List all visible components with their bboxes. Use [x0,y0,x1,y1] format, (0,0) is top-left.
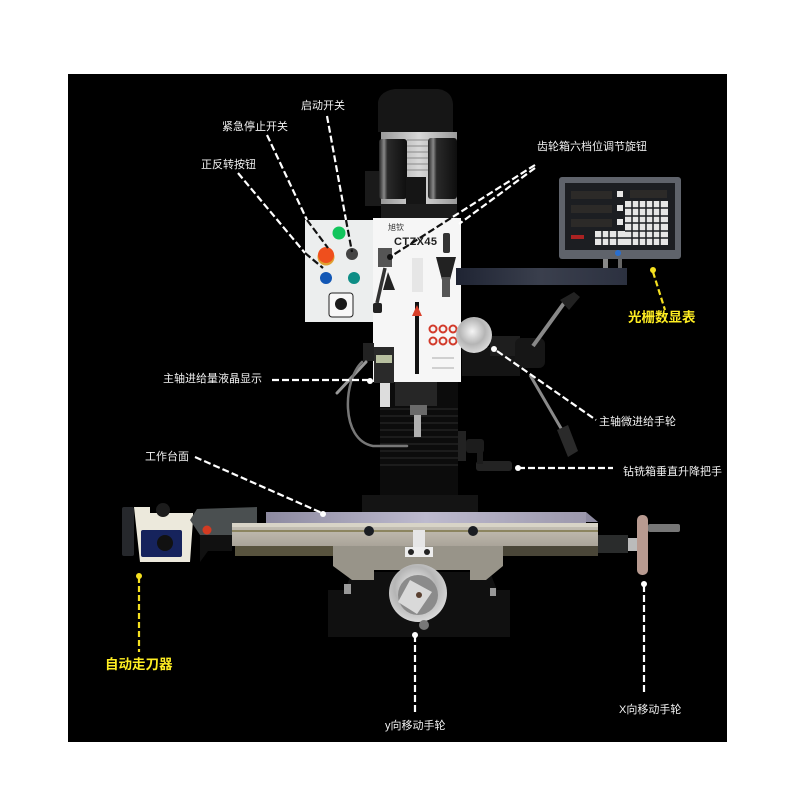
saddle [333,546,503,580]
drill head lift handle [458,431,512,471]
black background panel [68,74,727,742]
rotary selector [329,293,353,317]
control panel: left [305,220,374,322]
worktable [232,512,598,556]
labels: X向移动手轮 [619,702,681,716]
labels: 工作台面 [145,449,189,463]
warning icons [430,326,456,344]
digital readout arm [456,268,627,285]
leader lines [136,116,665,712]
labels: 主轴微进给手轮 [599,414,676,428]
spindle LCD display [363,343,394,407]
y handwheel [389,564,447,630]
start switch [346,248,358,260]
x handwheel [598,515,680,575]
left gear knob [373,248,395,313]
labels: 自动走刀器 [105,656,173,672]
feed scale [415,302,419,374]
base [328,572,510,637]
labels: 齿轮箱六档位调节旋钮 [537,139,647,153]
control panel: right: CTZX45 [394,236,437,248]
labels: 正反转按钮 [201,157,256,171]
emergency stop [318,247,334,266]
labels: 启动开关 [301,98,345,112]
teal button [348,272,360,284]
labels: 紧急停止开关 [222,119,288,133]
column and head [362,380,478,517]
labels: 钻铣箱垂直升降把手 [623,464,722,478]
lamp hose and left handle [337,362,407,446]
green button [332,226,346,240]
labels [105,98,722,732]
labels: y向移动手轮 [385,718,446,732]
right gear knob [436,233,456,297]
control panel: right: 旭钦 [388,222,404,232]
motor [365,89,457,218]
labels: 主轴进给量液晶显示 [163,371,262,385]
blue button [320,272,332,284]
control panel: right [373,218,461,382]
bracket [405,530,433,557]
labels: 光栅数显表 [628,309,696,325]
digital readout [559,177,681,268]
fine feed handwheel and levers [456,292,580,457]
feed motor unit [122,503,257,562]
